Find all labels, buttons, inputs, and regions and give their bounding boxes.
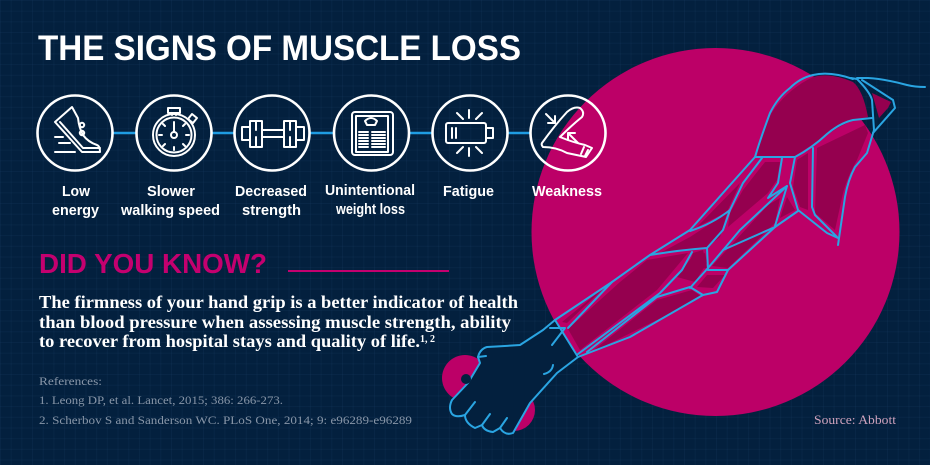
upper arm outlines xyxy=(755,74,853,157)
icon labels: Unintentional xyxy=(325,182,415,199)
heading: did you know: DID YOU KNOW? xyxy=(39,248,267,279)
triceps muscle xyxy=(815,125,868,230)
icon labels xyxy=(52,182,602,219)
icon: flexed arm, weakness xyxy=(530,96,606,170)
icon labels: Slower xyxy=(147,183,195,200)
hand details xyxy=(465,328,565,428)
icon: dumbbell, decreased strength xyxy=(234,96,310,170)
forearm outlines xyxy=(768,158,787,226)
references: References: xyxy=(39,374,102,388)
small magenta circle behind thumb xyxy=(442,355,488,401)
icon labels: Weakness xyxy=(532,183,602,200)
arm illustration xyxy=(450,74,925,434)
body text: 1, 2 xyxy=(420,334,435,345)
icon labels: walking speed xyxy=(120,202,220,219)
forearm muscles xyxy=(568,253,688,350)
small magenta circle behind fingers xyxy=(493,389,535,431)
hand xyxy=(450,320,578,434)
references: 1. Leong DP, et al. Lancet, 2015; 386: 266-273. xyxy=(39,393,283,407)
icon: shoe, low energy xyxy=(38,96,112,170)
source credit: Source: Abbott xyxy=(814,413,897,427)
icon labels: Fatigue xyxy=(443,183,494,200)
icon: weighing scale, unintentional weight loss xyxy=(334,96,409,170)
icon labels: energy xyxy=(52,202,100,219)
icon labels: Decreased xyxy=(235,183,307,200)
body text xyxy=(39,292,518,351)
thumb gap xyxy=(461,374,471,384)
references: 2. Scherbov S and Sanderson WC. PLoS One, 2014; 9: e96289-e96289 xyxy=(39,413,412,427)
icon labels: strength xyxy=(242,202,301,219)
icon labels: Low xyxy=(62,183,90,200)
title: THE SIGNS OF MUSCLE LOSS xyxy=(38,29,521,68)
shoulder muscle xyxy=(872,93,891,118)
icon labels: weight loss xyxy=(335,201,405,218)
references xyxy=(39,374,412,427)
body text: The firmness of your hand grip is a better indicator of health xyxy=(39,292,518,312)
heading rule xyxy=(288,270,449,272)
body text: to recover from hospital stays and quality of life. xyxy=(39,331,420,351)
icon: low battery, fatigue xyxy=(432,96,508,170)
icon: stopwatch, slower walking speed xyxy=(136,96,212,170)
deltoid muscle xyxy=(757,75,868,156)
large magenta circle xyxy=(532,48,900,416)
connector lines between icons xyxy=(112,132,531,134)
upper-arm inner muscles xyxy=(793,153,808,210)
body text: than blood pressure when assessing muscle strength, ability xyxy=(39,312,511,332)
